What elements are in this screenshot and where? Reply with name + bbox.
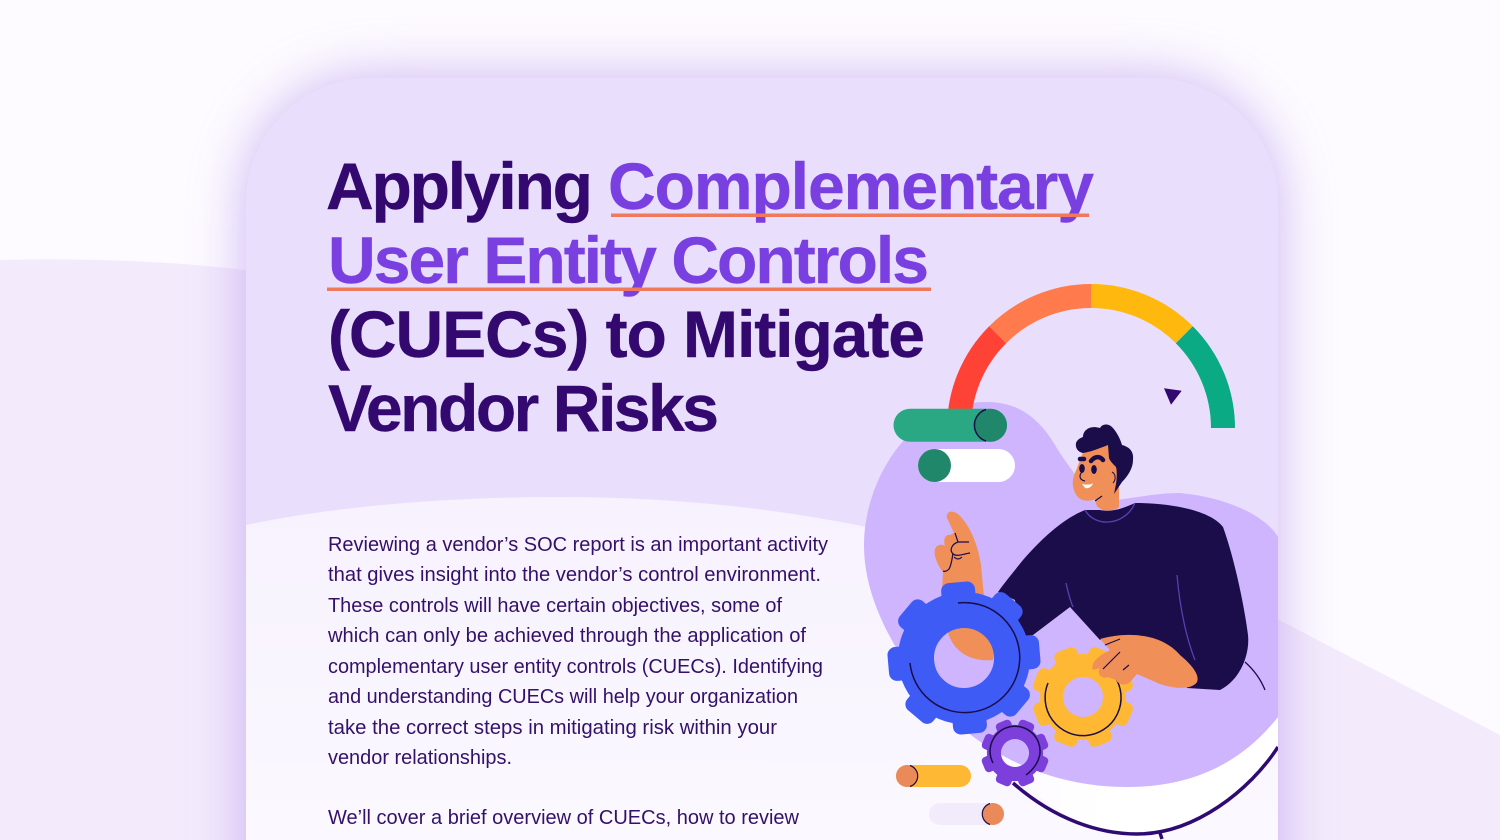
icon: purple gear arc xyxy=(990,726,1040,775)
icon: yellow gear xyxy=(1033,647,1133,747)
neck xyxy=(1093,485,1119,511)
hair xyxy=(1076,424,1133,494)
icon: blue gear arc xyxy=(910,603,1020,713)
sweater details xyxy=(1066,503,1195,660)
raised hand xyxy=(935,512,994,660)
eyes xyxy=(1079,464,1097,474)
sweater xyxy=(998,503,1248,690)
chin line xyxy=(1095,496,1102,501)
text block: introduction: and understanding CUECs will help your organization xyxy=(328,685,798,708)
smile xyxy=(1082,483,1093,488)
illustration: lower hand xyxy=(1092,635,1198,688)
text block: introduction: take the correct steps in mitigating risk within your xyxy=(328,716,777,739)
nose xyxy=(1080,472,1085,481)
icon: green toggle on xyxy=(894,409,1007,442)
title: Applying xyxy=(326,149,593,223)
illustration: white circle and stand xyxy=(1012,718,1278,840)
icon: gauge pointer xyxy=(1164,388,1182,405)
icon: blue gear xyxy=(888,582,1040,734)
illustration: purple blob xyxy=(864,402,1278,787)
hand lines xyxy=(943,533,970,571)
title: User Entity Controls xyxy=(328,223,929,297)
text block: introduction: These controls will have certain objectives, some of xyxy=(328,594,782,617)
icon: white toggle off xyxy=(918,449,1015,482)
text block: introduction: We’ll cover a brief overview of CUECs, how to review xyxy=(328,806,799,829)
illustration xyxy=(864,296,1278,839)
title: Complementary xyxy=(608,149,1094,223)
text block: introduction: complementary user entity controls (CUECs). Identifying xyxy=(328,655,823,678)
text block: introduction: that gives insight into the vendor’s control environment. xyxy=(328,563,821,586)
illustration: person xyxy=(935,424,1265,690)
icon: purple gear xyxy=(982,720,1048,786)
face xyxy=(1073,445,1119,501)
title xyxy=(326,149,1094,445)
eyes and brows xyxy=(1080,457,1103,461)
icon: light toggle xyxy=(929,803,1004,825)
ear xyxy=(1112,472,1115,483)
panel: main card xyxy=(246,78,1278,840)
text block: introduction: vendor relationships. xyxy=(328,746,512,769)
text block: introduction xyxy=(327,533,829,829)
chart: risk gauge xyxy=(959,296,1223,428)
title: (CUECs) to Mitigate xyxy=(328,297,925,371)
icon: yellow gear arc xyxy=(1045,677,1121,736)
text block: introduction: Reviewing a vendor’s SOC report is an important activity xyxy=(328,533,829,556)
icon: yellow toggle xyxy=(896,765,971,787)
text block: introduction: which can only be achieved through the application of xyxy=(327,624,806,647)
title: Vendor Risks xyxy=(328,371,719,445)
